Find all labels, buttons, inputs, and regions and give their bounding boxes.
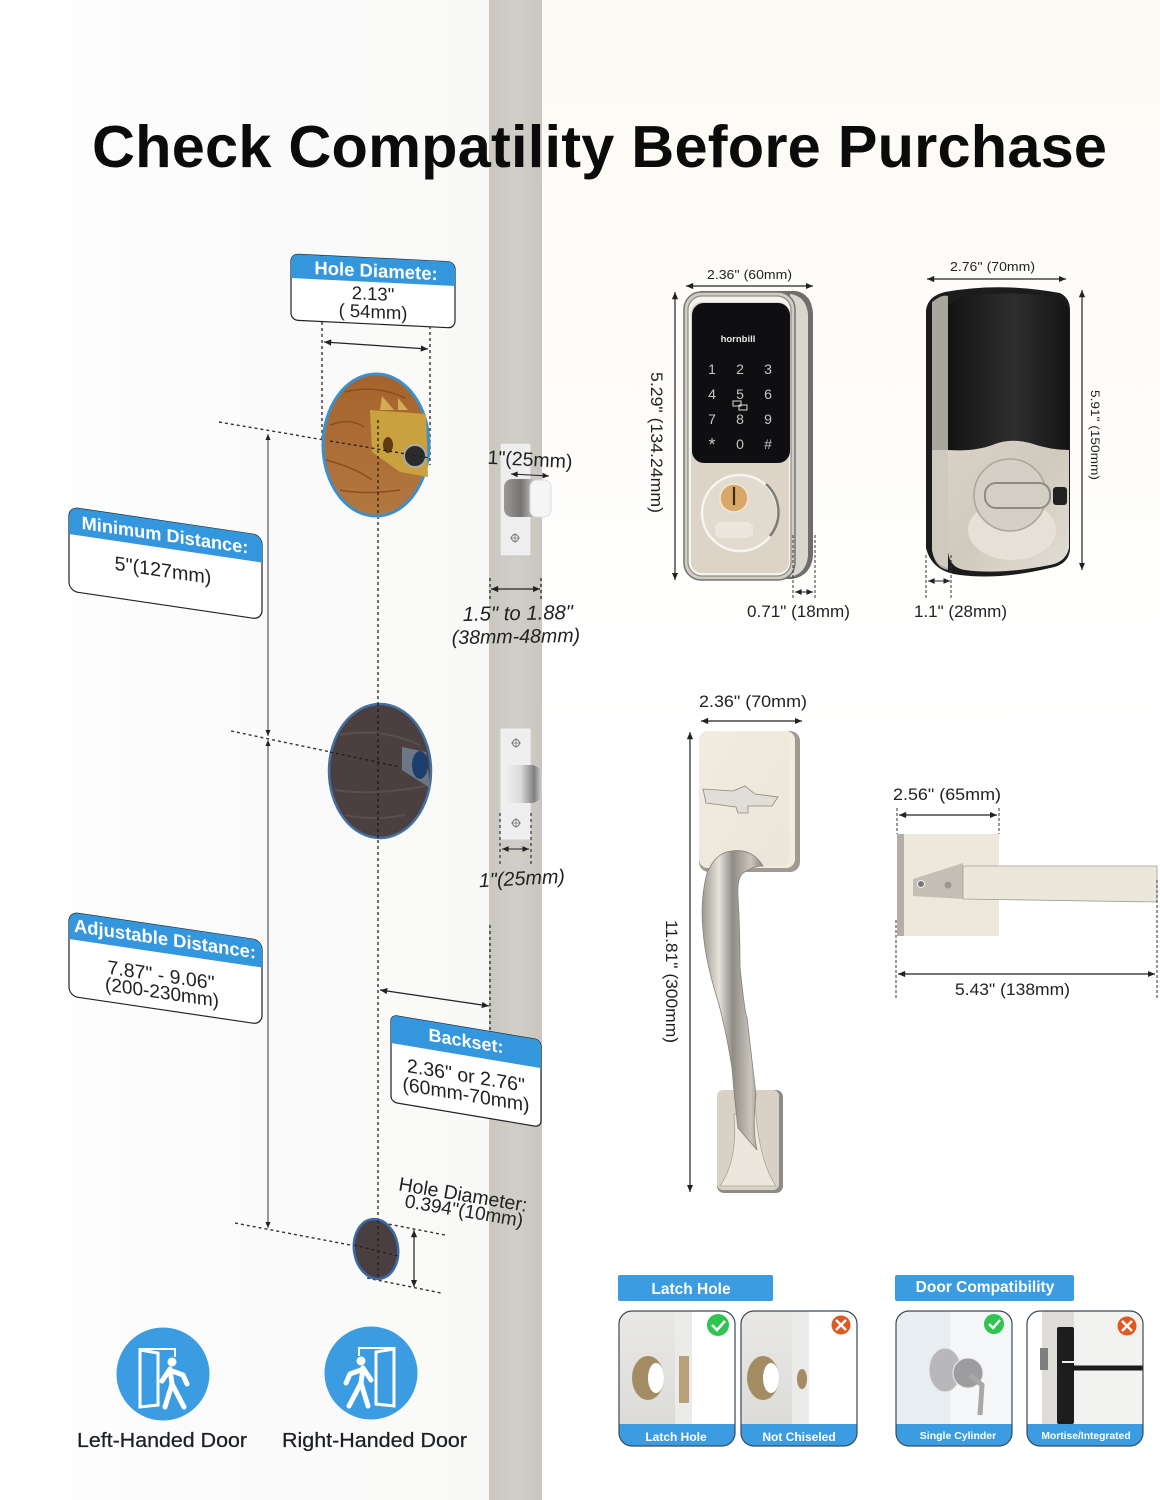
label: small hole: 0.394"(10mm) — [403, 1191, 525, 1232]
heading: latch hole — [618, 1275, 773, 1301]
label: minimum distance: Minimum Distance: — [82, 512, 248, 557]
label: adjustable distance: (200-230mm) — [105, 974, 219, 1012]
hole: spindle bore — [329, 703, 431, 838]
dimension: keypad depth: 0.71" (18mm) — [747, 602, 850, 621]
product: keypad front view: * — [708, 435, 716, 455]
label: door thickness — [451, 602, 580, 649]
background: right panel — [542, 0, 1160, 1500]
dimension: keypad width: 2.36'' (60mm) — [707, 267, 792, 282]
product: keypad front view: hornbill — [721, 334, 755, 345]
label: latch width: 1"(25mm) — [487, 447, 573, 473]
hole diameter label: Hole Diamete: — [314, 257, 438, 284]
product: interior assembly — [926, 287, 1070, 576]
tile: single cylinder: Single Cylinder — [920, 1430, 996, 1442]
product: keypad front view: # — [764, 436, 772, 452]
label: plate width: 1"(25mm) — [478, 866, 566, 892]
product: keypad front view — [684, 291, 813, 580]
product: keypad front view: 4 — [708, 386, 716, 402]
product: keypad front view: 6 — [764, 386, 772, 402]
heading: latch hole: Latch Hole — [651, 1281, 731, 1298]
dimension: handle width — [699, 692, 807, 721]
label: door thickness: (38mm-48mm) — [451, 625, 580, 649]
tile: latch hole — [619, 1311, 735, 1446]
tile: mortise — [1027, 1311, 1143, 1446]
arrow: small hole — [413, 1230, 415, 1287]
label: small hole: Hole Diameter: — [397, 1174, 529, 1217]
small mounting hole — [350, 1216, 402, 1282]
dimension: assembly width: 2.76'' (70mm) — [950, 259, 1035, 274]
product: interior lever — [897, 834, 1157, 936]
panel: installation diagram — [69, 254, 580, 1293]
dashed guide lines — [219, 322, 541, 1293]
arrow: plate width measure — [502, 848, 529, 850]
arrow: backset — [380, 990, 489, 1006]
label: backset — [391, 1015, 541, 1127]
dimension: handle height: 11.81" (300mm) — [662, 920, 681, 1043]
label: backset: Backset: — [429, 1025, 503, 1057]
product: keypad front view: 7 — [708, 411, 716, 427]
product: keypad front view: 3 — [764, 361, 772, 377]
label: adjustable distance — [69, 912, 262, 1024]
dimension: assembly depth — [914, 555, 1007, 621]
latch side view — [500, 443, 551, 556]
arrow: hole width — [324, 342, 428, 349]
arrow: minimum distance — [267, 434, 269, 736]
arrow: door thickness — [491, 588, 540, 590]
product: keypad front view: 2 — [736, 361, 744, 377]
tile: not chiseled: Not Chiseled — [762, 1430, 836, 1444]
label: backset: 2.36" or 2.76" — [407, 1055, 525, 1097]
tile: single cylinder — [896, 1311, 1012, 1446]
tile: latch hole: Latch Hole — [645, 1430, 707, 1444]
heading: door compatibility: Door Compatibility — [916, 1279, 1055, 1296]
tile: not chiseled — [741, 1311, 857, 1446]
dimension: lever length — [896, 880, 1157, 999]
dimension: keypad width — [686, 267, 813, 286]
icon: right-handed door — [324, 1326, 418, 1420]
hole diameter label: 2.13" — [352, 282, 394, 305]
background: door face — [0, 0, 490, 1500]
dimension: keypad height: 5.29" (134.24mm) — [647, 372, 666, 513]
product: keypad front view: 5 — [736, 386, 744, 402]
label: door thickness: 1.5" to 1.88" — [463, 602, 574, 626]
product: keypad front view: 1 — [708, 361, 716, 377]
label: adjustable distance: 7.87" - 9.06" — [107, 957, 215, 994]
product: keypad front view: 9 — [764, 411, 772, 427]
label: adjustable distance: Adjustable Distance: — [74, 915, 256, 963]
dimension: assembly depth: 1.1" (28mm) — [914, 602, 1007, 621]
label: minimum distance: 5"(127mm) — [115, 553, 211, 589]
hole diameter label — [291, 254, 455, 328]
faceplate side view — [500, 728, 542, 840]
product: keypad front view: 0 — [736, 436, 744, 452]
cross bore hole with latch — [323, 374, 430, 516]
dimension: assembly height: 5.91" (150mm) — [1088, 390, 1102, 480]
dimension: lever length: 5.43" (138mm) — [955, 980, 1070, 999]
dimension: rose width: 2.56" (65mm) — [893, 785, 1001, 804]
product: exterior handle — [699, 731, 800, 1193]
label: left-handed door: Left-Handed Door — [77, 1429, 247, 1452]
title: Check Compatility Before Purchase — [92, 113, 1107, 180]
label: right-handed door: Right-Handed Door — [282, 1429, 467, 1452]
arrow: plate width — [500, 813, 531, 865]
label: backset: (60mm-70mm) — [402, 1074, 530, 1117]
product: keypad front view: 8 — [736, 411, 744, 427]
hole diameter label: ( 54mm) — [339, 299, 407, 324]
dimension: rose width — [893, 785, 1001, 834]
tile: mortise: Mortise/Integrated — [1041, 1431, 1131, 1442]
background: door edge — [489, 0, 542, 1500]
icon: left-handed door — [116, 1328, 210, 1420]
heading: door compatibility — [895, 1275, 1074, 1301]
label: minimum distance — [69, 507, 262, 619]
arrow: adjustable distance — [267, 740, 269, 1228]
dimension: assembly width — [927, 259, 1066, 279]
dimension: keypad depth — [747, 535, 850, 621]
dimension: handle width: 2.36" (70mm) — [699, 692, 807, 711]
